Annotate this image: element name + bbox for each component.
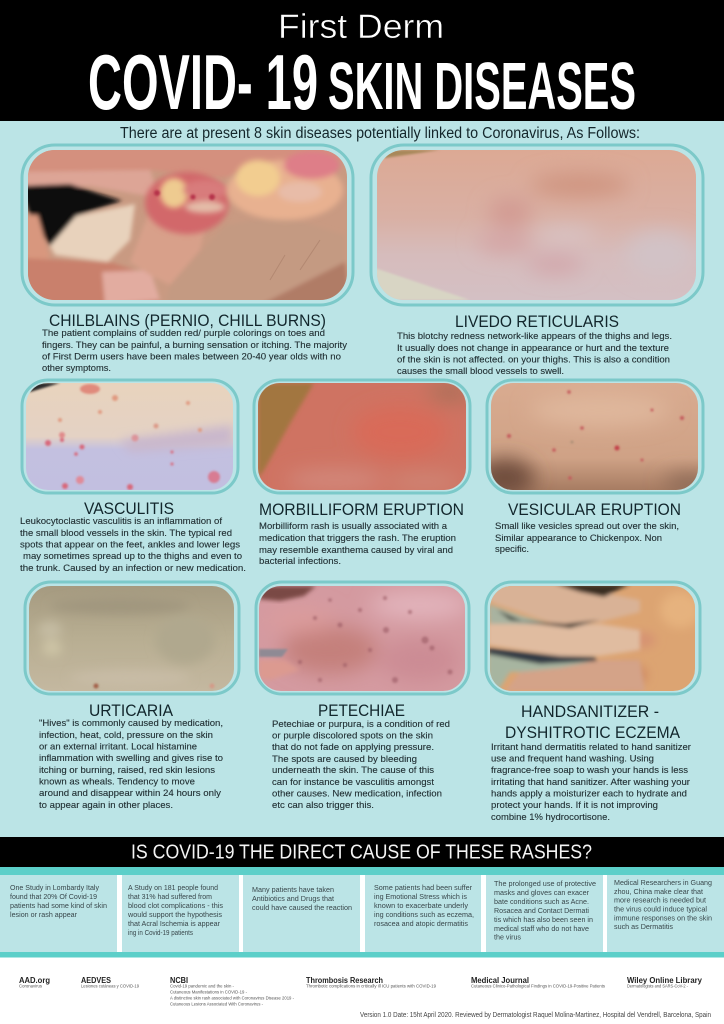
description: Morbilliform rash is usually associated with a bbox=[259, 521, 448, 532]
description: underneath the skin. The cause of this bbox=[272, 765, 434, 776]
photo: petechiae on hand bbox=[259, 586, 470, 691]
description: It usually does not change in appearance or hurt and the texture bbox=[397, 343, 669, 354]
column 2: blood clot study: ing in Covid-19 patients bbox=[128, 928, 193, 937]
description: may resemble exanthema caused by viral and bbox=[259, 545, 453, 556]
reference: aedves: AEDVES bbox=[81, 975, 111, 985]
description: fingers. They can be painful, a burning sensation or itching. The majority bbox=[42, 340, 347, 351]
column 5: masks and gloves: the virus bbox=[494, 932, 521, 942]
column 1: lombardy study: One Study in Lombardy Italy bbox=[10, 883, 99, 892]
photo: chilblains toes bbox=[20, 145, 350, 305]
description: that do not fade on applying pressure. bbox=[272, 742, 434, 753]
reference: ncbi: NCBI bbox=[170, 975, 188, 985]
column 1: lombardy study bbox=[10, 883, 107, 919]
column 2: blood clot study: blood clot complications - this bbox=[128, 901, 223, 910]
column 4: emotional stress bbox=[374, 883, 474, 928]
reference: ncbi bbox=[170, 975, 295, 1006]
description: Irritant hand dermatitis related to hand sanitizer bbox=[491, 742, 692, 753]
description: Petechiae or purpura, is a condition of red bbox=[272, 719, 450, 730]
description: specific. bbox=[495, 544, 529, 555]
photo: hand dermatitis bbox=[488, 584, 700, 691]
column 1: lombardy study: patients had some kind of skin bbox=[10, 901, 107, 910]
reference: aedves bbox=[81, 975, 140, 988]
description: hands apply a moisturizer each to hydrate and bbox=[491, 788, 687, 800]
description: the small blood vessels in the skin. The typical red bbox=[20, 528, 232, 539]
column 5: masks and gloves bbox=[494, 879, 596, 942]
column 4: emotional stress: Some patients had been suffer bbox=[374, 883, 472, 892]
header band bbox=[0, 0, 724, 126]
description: causes the small blood vessels to swell. bbox=[397, 366, 564, 377]
column 6: guangzhou researchers bbox=[614, 878, 712, 931]
column 1: lombardy study: lesion or rash appear bbox=[10, 910, 77, 919]
reference: aad: Coronavirus bbox=[19, 984, 42, 988]
column 6: guangzhou researchers: Medical Researchers in Guang bbox=[614, 878, 712, 887]
description: or an external irritant. Local histamine bbox=[39, 742, 197, 752]
heading: HANDSANITIZER - bbox=[521, 702, 659, 721]
reference: thrombosis research: Thrombosis Research bbox=[306, 975, 383, 985]
column 5: masks and gloves: The prolonged use of protective bbox=[494, 879, 596, 888]
description: inflammation with swelling and gives rise to bbox=[39, 753, 223, 764]
description: other causes. New medication, infection bbox=[272, 788, 442, 800]
main title: COVID- 19 bbox=[88, 38, 318, 126]
panel: vesicular eruption bbox=[475, 380, 716, 555]
column 5: masks and gloves: masks and gloves can exacer bbox=[494, 888, 589, 897]
heading: CHILBLAINS (PERNIO, CHILL BURNS) bbox=[49, 311, 326, 330]
panel: vasculitis bbox=[20, 380, 246, 574]
reference: wiley online library: Dermatologists and SARS-CoV-2 - bbox=[627, 984, 689, 988]
column 5: masks and gloves: medical staff who do not have bbox=[494, 924, 589, 933]
panel: petechiae bbox=[256, 582, 470, 811]
reference: aad bbox=[19, 975, 50, 988]
columns background bbox=[0, 867, 724, 1024]
description: fragrance-free soap to wash your hands is less bbox=[491, 765, 688, 776]
column 4: emotional stress: rosacea and atopic dermatitis bbox=[374, 919, 468, 928]
reference: medical journal bbox=[471, 975, 605, 988]
heading: URTICARIA bbox=[89, 701, 174, 720]
description: combine 1% hydrocortisone. bbox=[491, 812, 610, 823]
panel: livedo reticularis bbox=[371, 145, 703, 377]
column 3: antibiotics and drugs bbox=[252, 885, 352, 912]
description bbox=[42, 328, 347, 374]
reference: aad: AAD.org bbox=[19, 975, 50, 985]
heading: PETECHIAE bbox=[318, 701, 405, 720]
description: or purple discolored spots on the skin bbox=[272, 730, 433, 742]
panel: chilblains bbox=[20, 145, 353, 374]
description: itching or burning, raised, red skin lesions bbox=[39, 765, 215, 776]
banner: is covid-19 the direct cause bbox=[0, 837, 724, 867]
description: bacterial infections. bbox=[259, 556, 341, 567]
photo: livedo reticularis bbox=[375, 150, 696, 300]
column 2: blood clot study bbox=[127, 883, 223, 937]
description bbox=[39, 718, 223, 811]
column 5: masks and gloves: tis which has also been seen in bbox=[494, 915, 593, 924]
description: may sometimes spread up to the thighs and even to bbox=[23, 551, 242, 562]
reference: ncbi: Cutaneous Lesions Associated With Coronavirus - bbox=[170, 1002, 264, 1006]
banner: is covid-19 the direct cause: IS COVID-19 THE DIRECT CAUSE OF THESE RASHES? bbox=[131, 842, 592, 864]
column 6: guangzhou researchers: the virus could induce typical bbox=[614, 904, 707, 914]
description bbox=[397, 331, 672, 377]
footer references bbox=[19, 975, 702, 1006]
description: Leukocytoclastic vasculitis is an inflammation of bbox=[20, 516, 222, 527]
reference: wiley online library bbox=[627, 975, 702, 988]
description: Small like vesicles spread out over the skin, bbox=[495, 521, 679, 532]
description: of the skin is not affected. on your thighs. This is also a condition bbox=[397, 354, 670, 366]
column 2: blood clot study: that Acral Ischemia is appear bbox=[128, 919, 220, 928]
heading: DYSHITROTIC ECZEMA bbox=[505, 723, 681, 742]
photo: morbilliform rash bbox=[258, 382, 472, 490]
description: protect your hands. If it is not improving bbox=[491, 800, 658, 811]
column 2: blood clot study: A Study on 181 people found bbox=[128, 883, 218, 892]
photo: vasculitis spots bbox=[26, 383, 233, 490]
brand name: First Derm bbox=[278, 8, 444, 46]
description: known as wheals. Tendency to move bbox=[39, 776, 195, 788]
column 4: emotional stress: ing Emotional Stress which is bbox=[374, 892, 467, 901]
reference: wiley online library: Wiley Online Library bbox=[627, 975, 702, 985]
column 2: blood clot study: would support the hypothesis bbox=[127, 910, 222, 919]
description: This blotchy redness network-like appears of the thighs and legs. bbox=[397, 331, 672, 342]
column 3: antibiotics and drugs: could have caused the reaction bbox=[252, 903, 352, 912]
heading: MORBILLIFORM ERUPTION bbox=[259, 500, 464, 519]
reference: medical journal: Medical Journal bbox=[471, 975, 529, 985]
panel: handsanitizer dyshitrotic eczema bbox=[486, 582, 700, 823]
description: Similar appearance to Chickenpox. Non bbox=[495, 533, 662, 544]
subtitle: There are at present 8 skin diseases potentially linked to Coronavirus, As Follows: bbox=[120, 125, 640, 142]
description bbox=[272, 719, 450, 811]
description bbox=[259, 521, 456, 567]
column 4: emotional stress: known to exacerbate underly bbox=[374, 901, 468, 910]
description: spots that appear on the feet, ankles and lower legs bbox=[20, 540, 240, 550]
column 6: guangzhou researchers: such as Dermatitis bbox=[614, 922, 673, 931]
column 4: emotional stress: ing conditions such as eczema, bbox=[374, 910, 474, 919]
reference: ncbi: A distinctive skin rash associated with Coronavirus Disease 2019 - bbox=[170, 996, 295, 1000]
reference: thrombosis research bbox=[306, 975, 437, 988]
description: of First Derm users have been males between 20-40 year olds with no bbox=[42, 352, 341, 362]
description: use and frequent hand washing. Using bbox=[491, 754, 654, 764]
column 6: guangzhou researchers: immune responses on the skin bbox=[614, 914, 712, 922]
heading bbox=[505, 702, 681, 742]
panel: urticaria bbox=[25, 582, 239, 811]
description: irritating that hand sanitizer. After washing your bbox=[491, 777, 691, 788]
reference: ncbi: Covid-19 pandemic and the skin - bbox=[170, 984, 235, 988]
description: other symptoms. bbox=[42, 363, 111, 374]
reference: ncbi: Cutaneous Manifestations in COVID-19 - bbox=[170, 990, 248, 994]
heading: VESICULAR ERUPTION bbox=[508, 500, 681, 519]
column 5: masks and gloves: bate conditions such as Acne. bbox=[494, 897, 589, 906]
photo: vesicular spots bbox=[491, 383, 698, 490]
column 6: guangzhou researchers: zhou, China make clear that bbox=[614, 887, 704, 896]
column 5: masks and gloves: Rosacea and Contact Dermati bbox=[494, 906, 589, 915]
main title bbox=[88, 38, 636, 126]
description: The spots are caused by bleeding bbox=[272, 754, 417, 765]
description: medication that triggers the rash. The eruption bbox=[259, 533, 456, 544]
description: infection, heat, cold, pressure on the skin bbox=[39, 730, 213, 741]
description: etc can also trigger this. bbox=[272, 800, 374, 811]
photo: urticaria wheals bbox=[29, 586, 234, 691]
column 6: guangzhou researchers: more research is needed but bbox=[614, 896, 707, 904]
reference: thrombosis research: Thrombotic complications in critically ill ICU patients with COVID-19 bbox=[306, 984, 437, 988]
description: can for instance be vasculitis amongst bbox=[272, 777, 434, 788]
description: "Hives" is commonly caused by medication, bbox=[39, 718, 223, 729]
description: to appear again in other places. bbox=[39, 800, 173, 811]
heading: VASCULITIS bbox=[84, 499, 174, 518]
description bbox=[20, 516, 246, 574]
reference: medical journal: Cutaneous Clinico-Pathological Findings in COVID-19-Positive Patients bbox=[471, 984, 605, 988]
heading: LIVEDO RETICULARIS bbox=[455, 312, 619, 331]
description: The patient complains of sudden red/ purple colorings on toes and bbox=[42, 328, 325, 339]
column 1: lombardy study: found that 20% Of Covid-19 bbox=[10, 892, 97, 901]
description bbox=[491, 742, 692, 823]
column 2: blood clot study: that 31% had suffered from bbox=[128, 892, 212, 901]
description: around and disappear within 24 hours only bbox=[39, 788, 221, 799]
description bbox=[495, 521, 679, 555]
column 3: antibiotics and drugs: Antibiotics and Drugs that bbox=[252, 894, 335, 903]
column 3: antibiotics and drugs: Many patients have taken bbox=[252, 885, 334, 894]
reference: aedves: Lesiones cutáneas y COVID-19 bbox=[81, 984, 140, 988]
panel: morbilliform eruption bbox=[254, 380, 472, 567]
description: the trunk. Caused by an infection or new medication. bbox=[20, 563, 246, 574]
